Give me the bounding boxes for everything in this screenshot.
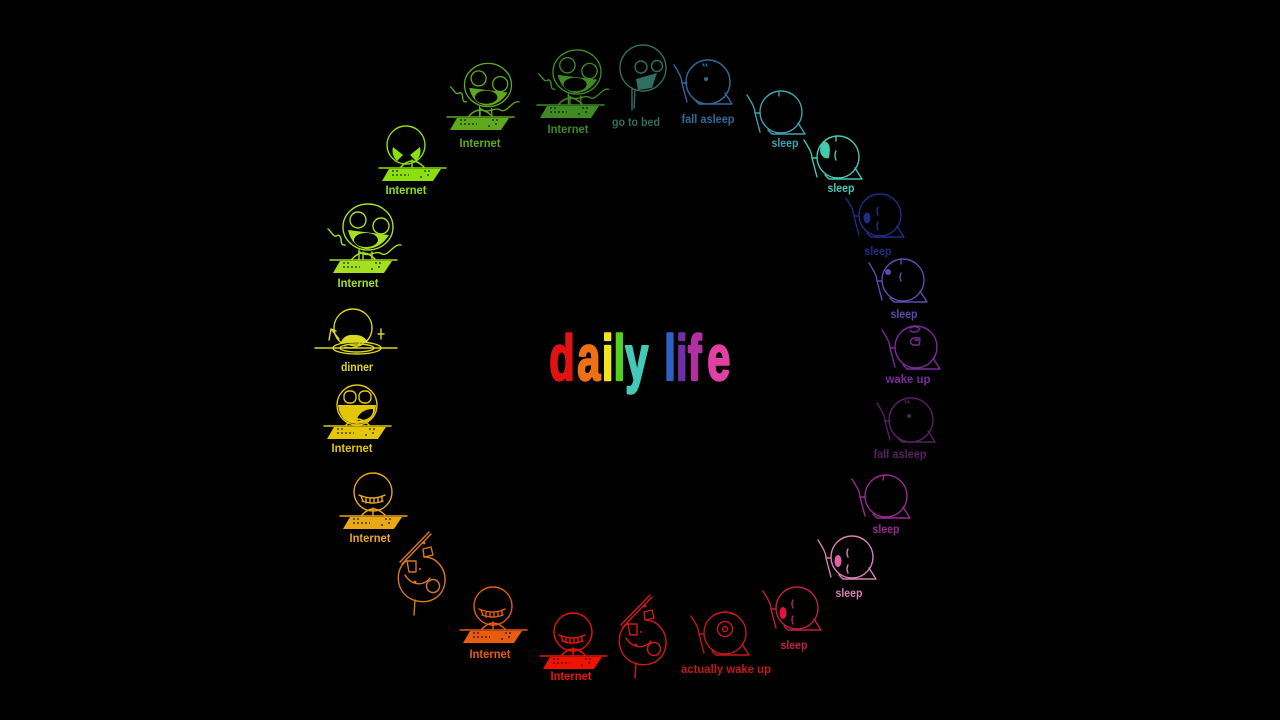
figure: sleep 5: sleep [872, 522, 900, 536]
figure: actually wake up [681, 612, 771, 676]
figure: internet orange-red: Internet [470, 647, 510, 661]
figure: wake up: wake up [885, 372, 930, 386]
figure: internet awesome face: Internet [332, 441, 372, 455]
figure: internet amber: Internet [350, 531, 390, 545]
figure: internet happy green [447, 63, 519, 150]
figure: fall asleep: fall asleep [682, 112, 734, 126]
figure: internet angry [379, 126, 446, 197]
title: daily life: e [707, 323, 730, 394]
figure: fall asleep 2 [874, 398, 935, 461]
figure: sleep 3 [846, 194, 904, 258]
figure: sleep 6 [818, 536, 876, 600]
figure: internet happy dark green [537, 50, 609, 136]
title: daily life: l [664, 323, 676, 394]
figure: sleep 1: sleep [772, 136, 798, 150]
title: daily life: i [602, 323, 613, 394]
figure: sleep 5 [852, 475, 910, 536]
figure: sleep 7: sleep [780, 638, 808, 652]
figure: dinner [315, 309, 397, 374]
figure: sleep 4: sleep [890, 307, 918, 321]
figure: sleep 1 [747, 91, 805, 150]
figure: fall asleep 2: fall asleep [874, 447, 926, 461]
figure: impact red [619, 595, 666, 678]
title: daily life [549, 323, 730, 394]
figure: sleep 6: sleep [836, 586, 862, 600]
title: daily life: f [688, 323, 702, 394]
title: daily life: i [676, 323, 688, 394]
figure: sleep 7 [763, 587, 821, 652]
figure: internet red [540, 613, 607, 683]
title: daily life: d [549, 323, 575, 394]
figure: sleep 2: sleep [828, 181, 854, 195]
figure: sleep 3: sleep [864, 244, 892, 258]
figure: internet red: Internet [550, 669, 592, 683]
title: daily life: l [614, 323, 625, 394]
figure: internet happy green: Internet [460, 136, 500, 150]
figure: impact orange [398, 532, 445, 615]
figure: internet happy lime [328, 204, 401, 290]
figure: go to bed: go to bed [612, 115, 660, 129]
title: daily life: y [625, 323, 660, 394]
figure: go to bed [612, 45, 666, 129]
figure: internet angry: Internet [386, 183, 426, 197]
figure: internet amber [340, 473, 407, 545]
figure: sleep 4 [869, 259, 927, 321]
figure: actually wake up: actually wake up [681, 662, 771, 676]
figure: internet awesome face [324, 385, 391, 455]
figure: wake up [882, 326, 940, 386]
figure: internet happy dark green: Internet [548, 122, 588, 136]
title: daily life: a [577, 323, 601, 394]
figure: dinner: dinner [341, 360, 373, 374]
figure: internet happy lime: Internet [338, 276, 378, 290]
figure: sleep 2 [804, 136, 862, 195]
figure: internet orange-red [460, 587, 527, 661]
figure: fall asleep [674, 60, 734, 126]
